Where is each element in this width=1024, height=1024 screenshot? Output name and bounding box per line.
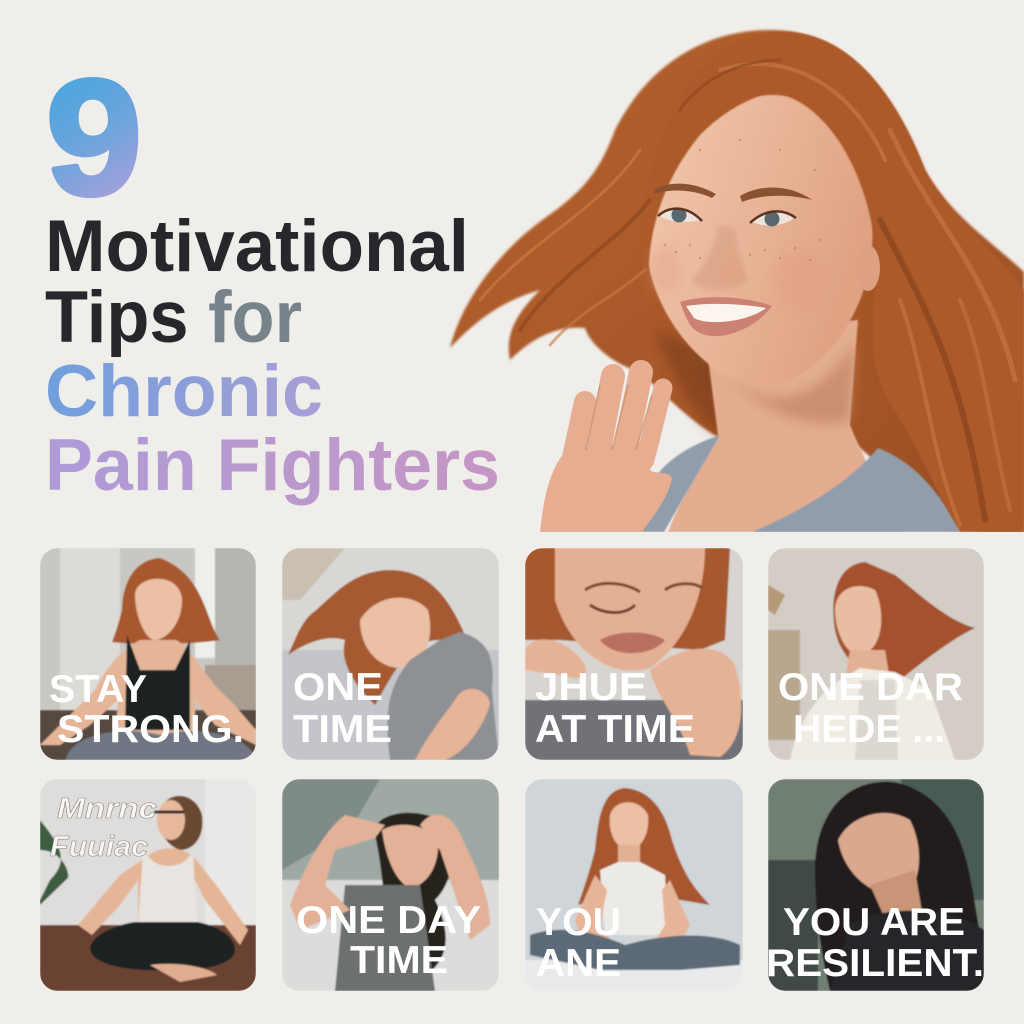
tip card 6: One day time [282, 779, 499, 991]
caption 8 line 2: RESILIENT. [766, 942, 984, 985]
caption 3 line 2: AT TIME [535, 708, 695, 751]
script lettering: Mnrnc [57, 793, 157, 825]
hero portrait: smiling red-haired woman [450, 30, 1024, 532]
caption 6 line 2: TIME [350, 939, 448, 982]
front hair [641, 32, 1024, 532]
title line: Pain Fighters: Pain Fighters [45, 425, 500, 506]
eyes [658, 208, 796, 226]
tip card 3: Close-up [525, 548, 743, 760]
cheek blush [646, 250, 678, 292]
photo 6 [282, 779, 499, 991]
script lettering: Fuuiac [50, 831, 148, 863]
title line: Chronic: Chronic [45, 351, 323, 432]
hair behind [450, 30, 1024, 532]
caption 7: YOU [536, 901, 621, 944]
caption 2: ONE [293, 666, 383, 709]
mouth and smile [680, 297, 772, 336]
title [45, 46, 500, 506]
caption 7 line 2: ANE [536, 942, 621, 985]
caption 1: STAY [49, 668, 147, 711]
darker hair on the right [952, 406, 1024, 532]
neck [668, 320, 905, 532]
tip card 8: You are resilient [766, 779, 984, 991]
numeral 9: 9 [46, 46, 142, 229]
raised hand [540, 372, 672, 532]
script lettering [50, 798, 157, 856]
caption 4 line 2: HEDE ... [793, 708, 945, 751]
photo 1 [40, 548, 256, 760]
photo 4 [768, 548, 984, 760]
neck shadow [748, 347, 860, 428]
photo 3 [525, 548, 743, 760]
tip card 1: Stay strong [40, 548, 256, 760]
photo 8 [768, 779, 984, 991]
shirt [640, 435, 960, 532]
caption 8: YOU ARE [783, 901, 965, 944]
title line: Tips for: Tips for [45, 277, 302, 358]
caption 6: ONE DAY [296, 899, 481, 942]
caption 4: ONE DAR [778, 666, 963, 709]
caption 3: JHUE [535, 666, 647, 709]
tip card 4: One dar hede [768, 548, 984, 760]
tip card 7: You ane [525, 779, 743, 991]
photo 2 [282, 548, 499, 760]
caption 2 line 2: TIME [293, 708, 392, 751]
face [646, 95, 873, 386]
eyebrows [654, 184, 812, 202]
ear [863, 246, 880, 291]
tip card 2: One time [282, 548, 499, 760]
freckles [664, 139, 821, 261]
dark hair under the chin [656, 331, 717, 438]
nose [692, 225, 748, 290]
tip card 5: Meditation [40, 779, 256, 991]
photo 5 [40, 779, 256, 991]
photo 7 [525, 779, 743, 991]
title line: Motivational: Motivational [45, 206, 469, 287]
caption 1 line 2: STRONG. [57, 708, 244, 751]
hair strands [480, 60, 1015, 525]
